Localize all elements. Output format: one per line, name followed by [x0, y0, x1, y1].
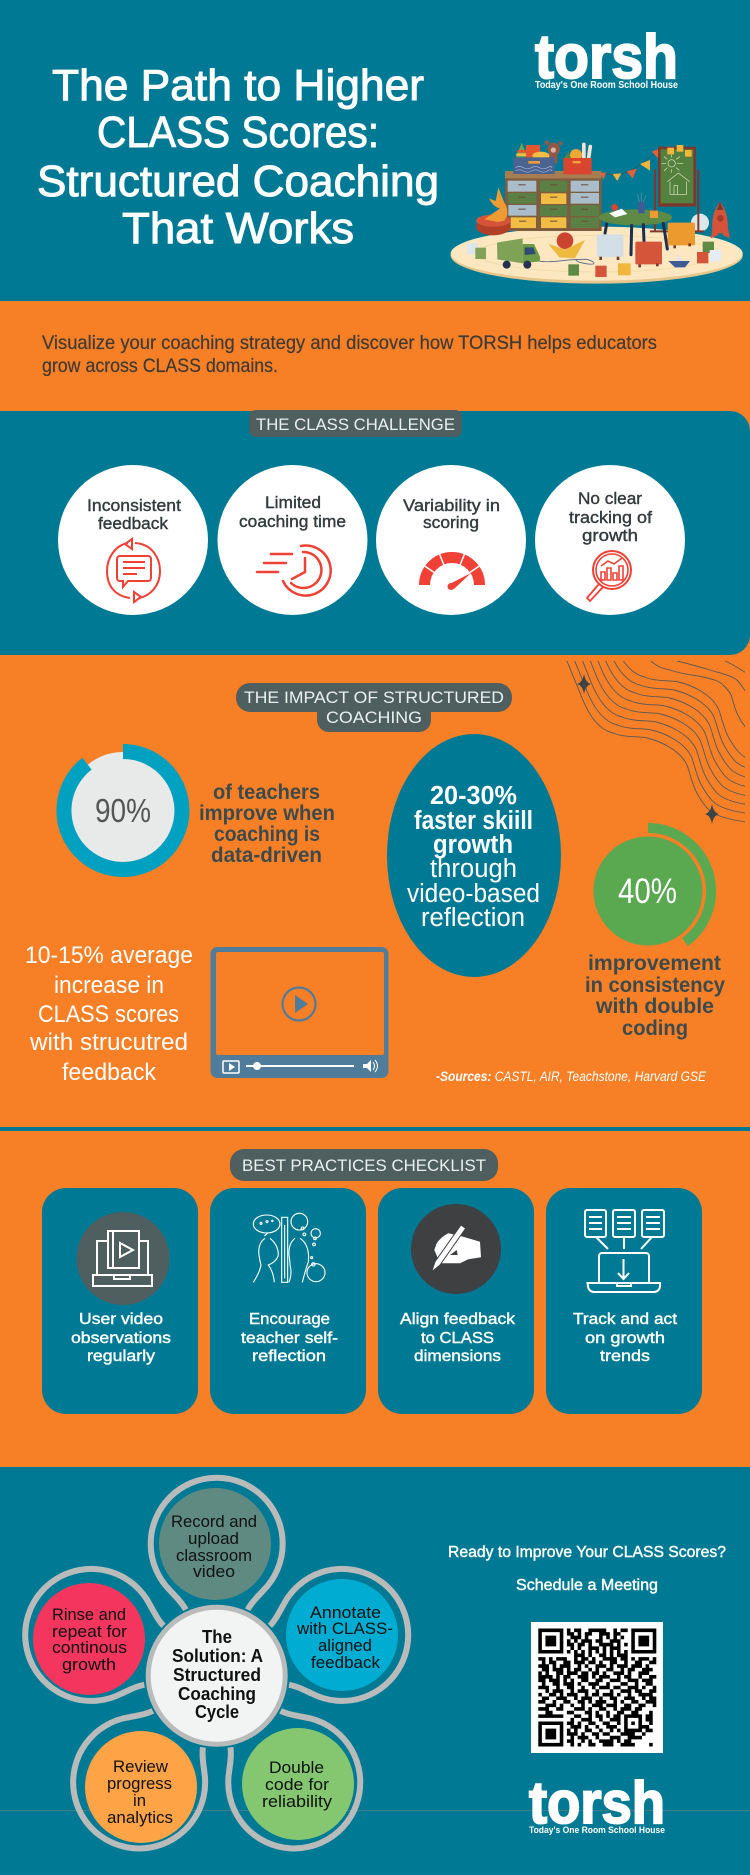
- step: rinse and repeat: continous: [52, 1638, 127, 1657]
- stat text: 90 percent of teachers: of teachers: [213, 781, 320, 804]
- challenge: limited coaching time: coaching time: [239, 512, 346, 531]
- decorative: wavy lines and stars: [566, 661, 745, 824]
- stat text: 10-15 percent average increase: 10-15% average: [25, 942, 193, 969]
- card: track growth trends: Track and act: [573, 1311, 678, 1328]
- step: record and upload: classroom: [176, 1546, 252, 1565]
- card: user video observations: [42, 1188, 198, 1414]
- card: align feedback: dimensions: [414, 1348, 501, 1365]
- step: rinse and repeat: growth: [62, 1655, 116, 1674]
- challenge: limited coaching time: [218, 465, 368, 615]
- cycle centre: the solution: The: [202, 1626, 232, 1647]
- card: align feedback: to CLASS: [421, 1330, 494, 1347]
- challenge: variability in scoring: [376, 465, 526, 615]
- stat: 20-30 percent ellipse: growth: [433, 831, 513, 859]
- stat text: improvement in consistency: in consistency: [585, 974, 725, 997]
- challenge: inconsistent feedback: Inconsistent: [87, 496, 181, 515]
- stat: 20-30 percent ellipse: reflection: [421, 904, 525, 932]
- icon: fast clock: [257, 546, 331, 596]
- stat text: improvement in consistency: [585, 952, 725, 1040]
- sources note: -Sources: CASTL, AIR, Teachstone, Harvard GSE: [436, 1069, 707, 1084]
- step: double code: reliability: [262, 1792, 333, 1811]
- stat: 40 percent green circle: [594, 828, 711, 946]
- step: review progress: Review: [113, 1757, 169, 1776]
- step: annotate: with CLASS-: [296, 1619, 393, 1638]
- chart: structured coaching cycle: [8, 1478, 425, 1875]
- call to action text: [448, 1544, 726, 1594]
- panel: the class challenge: [0, 410, 750, 655]
- card: align feedback: Align feedback: [400, 1311, 516, 1328]
- call to action text: Ready to Improve Your CLASS Scores?: [448, 1544, 726, 1561]
- call to action text: Schedule a Meeting: [516, 1577, 658, 1594]
- stat: 20-30 percent ellipse: faster skiill: [414, 807, 533, 835]
- cycle centre: the solution: Coaching: [178, 1683, 256, 1704]
- icon: documents into laptop: [585, 1210, 664, 1292]
- illustration: classroom: [451, 140, 743, 284]
- step: record and upload: [159, 1488, 271, 1600]
- card: encourage teacher self-reflection: reflection: [252, 1348, 326, 1365]
- step: annotate: aligned: [318, 1636, 372, 1655]
- title: Structured Coaching: [37, 157, 439, 206]
- step: double code: Double: [269, 1758, 324, 1777]
- challenge: no clear tracking of growth: growth: [582, 526, 638, 545]
- step: annotate: Annotate: [310, 1603, 381, 1622]
- icon: gauge: [424, 554, 480, 590]
- card: user video observations: observations: [71, 1330, 171, 1347]
- challenge: variability in scoring: scoring: [423, 513, 479, 532]
- challenge: no clear tracking of growth: tracking of: [569, 508, 652, 527]
- card: encourage teacher self-reflection: [210, 1188, 366, 1414]
- stat: 20-30 percent ellipse: 20-30%: [430, 782, 517, 810]
- challenge: inconsistent feedback: feedback: [98, 514, 169, 533]
- step: rinse and repeat: [33, 1583, 145, 1695]
- heading: the impact of structured coaching: [236, 683, 512, 732]
- cycle centre: the solution: [148, 1607, 285, 1744]
- stat text: 90 percent of teachers: [199, 781, 335, 867]
- panel: header: [0, 0, 750, 301]
- stat: 20-30 percent ellipse: through: [430, 855, 517, 883]
- stat text: improvement in consistency: with double: [595, 995, 714, 1018]
- panel: solution footer: [0, 1467, 750, 1875]
- card: track growth trends: on growth: [585, 1330, 665, 1347]
- challenge: variability in scoring: Variability in: [403, 496, 500, 515]
- logo: torsh footer: torsh: [529, 1770, 665, 1836]
- stat text: 90 percent of teachers: data-driven: [211, 844, 322, 867]
- icon: hand writing: [411, 1204, 501, 1294]
- step: record and upload: Record and: [171, 1512, 257, 1531]
- heading: the class challenge: [249, 410, 462, 437]
- stat text: 10-15 percent average increase: [25, 942, 193, 1086]
- decorative footer line: [0, 1810, 750, 1811]
- cycle centre: the solution: Structured: [173, 1664, 261, 1685]
- stat text: 90 percent of teachers: coaching is: [214, 823, 320, 846]
- card: user video observations: regularly: [87, 1348, 155, 1365]
- logo: torsh: torsh: [535, 23, 678, 92]
- step: record and upload: upload: [188, 1529, 239, 1548]
- stat: 20-30 percent ellipse: [387, 734, 561, 977]
- qr code: [531, 1622, 663, 1753]
- challenge: no clear tracking of growth: No clear: [578, 489, 642, 508]
- icon: video on laptop: [76, 1212, 170, 1305]
- challenge: limited coaching time: Limited: [265, 493, 321, 512]
- step: annotate: feedback: [311, 1653, 380, 1672]
- logo: torsh: Today's One Room School House: [535, 80, 678, 91]
- stat: 20-30 percent ellipse: video-based: [407, 880, 540, 908]
- challenge: no clear tracking of growth: [535, 465, 685, 615]
- icon: magnifier chart: [587, 551, 631, 601]
- step: review progress: in: [133, 1791, 146, 1810]
- challenge: inconsistent feedback: [58, 465, 208, 615]
- stat text: 10-15 percent average increase: increase in: [54, 972, 164, 999]
- step: review progress: [85, 1731, 197, 1843]
- title: CLASS Scores:: [97, 108, 379, 157]
- stat text: 10-15 percent average increase: with strucutred: [29, 1029, 188, 1056]
- heading: the class challenge: THE CLASS CHALLENGE: [256, 415, 455, 434]
- card: align feedback: [378, 1188, 534, 1414]
- step: rinse and repeat: repeat for: [52, 1622, 127, 1641]
- step: double code: [242, 1728, 354, 1840]
- card: user video observations: User video: [79, 1311, 163, 1328]
- stat text: improvement in consistency: coding: [622, 1017, 688, 1040]
- card: track growth trends: trends: [600, 1348, 650, 1365]
- card: track growth trends: [546, 1188, 702, 1414]
- heading: best practices checklist: BEST PRACTICES CHECKLIST: [242, 1156, 486, 1175]
- stat text: 90 percent of teachers: improve when: [199, 802, 335, 825]
- icon: feedback loop: [107, 539, 160, 602]
- divider band: [0, 1127, 750, 1131]
- step: annotate: [286, 1579, 398, 1691]
- step: review progress: progress: [107, 1774, 172, 1793]
- stat: 40 percent green circle: 40%: [618, 872, 677, 911]
- title: The Path to Higher: [52, 61, 424, 110]
- intro text: Visualize your coaching strategy and discover how TORSH helps educators: [42, 332, 657, 354]
- stat text: improvement in consistency: improvement: [588, 952, 721, 975]
- logo: torsh footer: Today's One Room School House: [529, 1825, 665, 1836]
- step: rinse and repeat: Rinse and: [52, 1605, 126, 1624]
- intro text: grow across CLASS domains.: [42, 355, 278, 377]
- heading: the impact of structured coaching: COACHING: [326, 708, 422, 727]
- icon: video player: [210, 947, 388, 1078]
- cycle centre: the solution: Solution: A: [172, 1645, 263, 1666]
- heading: the impact of structured coaching: THE IMPACT OF STRUCTURED: [244, 688, 504, 707]
- step: double code: code for: [265, 1775, 329, 1794]
- stat text: 10-15 percent average increase: CLASS scores: [38, 1001, 179, 1028]
- icon: reflecting figures: [253, 1213, 325, 1282]
- card: encourage teacher self-reflection: teacher self-: [241, 1330, 338, 1347]
- stat: 90 percent donut: [64, 752, 182, 869]
- title: That Works: [122, 204, 354, 253]
- card: encourage teacher self-reflection: Encourage: [249, 1311, 330, 1328]
- stat: 90 percent donut: 90%: [95, 792, 151, 829]
- title: [37, 61, 439, 253]
- step: review progress: analytics: [107, 1808, 173, 1827]
- cycle centre: the solution: Cycle: [195, 1701, 239, 1722]
- heading: best practices checklist: [230, 1149, 498, 1181]
- intro text: [42, 332, 657, 377]
- stat text: 10-15 percent average increase: feedback: [62, 1059, 157, 1086]
- step: record and upload: video: [193, 1562, 235, 1581]
